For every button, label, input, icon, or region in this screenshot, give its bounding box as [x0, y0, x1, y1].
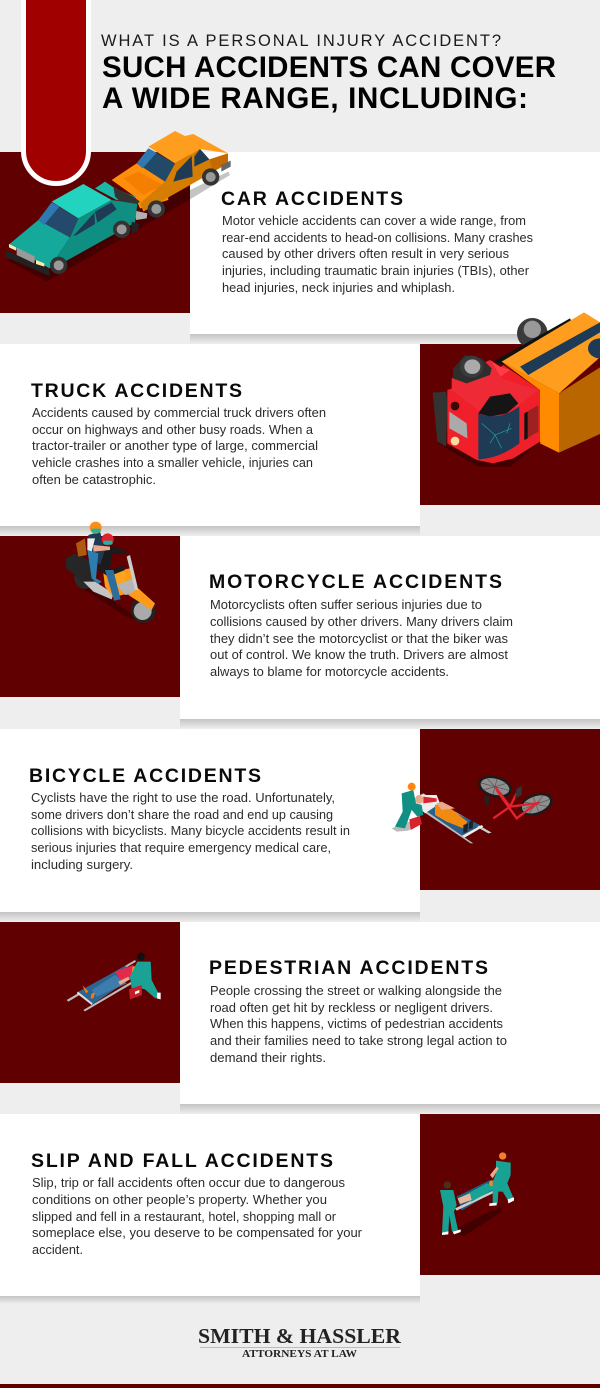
text block: bicycle accidents: Cyclists have the right to use the road. Unfortunately, [31, 791, 335, 805]
illustration: motorcycle riders [66, 522, 156, 625]
panel: bicycle accidents [0, 729, 600, 922]
footer bar [0, 1384, 600, 1388]
text block: slip and fall accidents: Slip, trip or fall accidents often occur due to dangerous [32, 1176, 345, 1190]
text block: truck accidents: vehicle crashes into a smaller vehicle, injuries can [32, 456, 313, 470]
text block: bicycle accidents: collisions with bicyclists. Many bicycle accidents result in [31, 824, 350, 838]
text block: car accidents: Motor vehicle accidents can cover a wide range, from [222, 214, 526, 228]
panel: pedestrian accidents [0, 922, 600, 1114]
logo: Smith & Hassler: ATTORNEYS AT LAW [242, 1349, 358, 1360]
text block: motorcycle accidents: always to blame for motorcycle accidents. [210, 665, 449, 679]
text block: slip and fall accidents: accident. [32, 1243, 83, 1257]
header tab [24, 0, 88, 183]
text block: car accidents: caused by other drivers often result in very serious [222, 247, 509, 261]
panel: truck accidents [0, 344, 600, 536]
text block: slip and fall accidents: conditions on other people’s property. Whether you [32, 1193, 327, 1207]
text block: pedestrian accidents: People crossing the street or walking alongside the [210, 984, 502, 998]
text block: motorcycle accidents: Motorcyclists often suffer serious injuries due to [210, 598, 482, 612]
text block: slip and fall accidents [32, 1176, 363, 1257]
text block: truck accidents: tractor-trailer or another type of large, commercial [32, 439, 318, 453]
text block: truck accidents: Accidents caused by commercial truck drivers often [32, 406, 326, 420]
text block: truck accidents: occur on highways and other busy roads. When a [32, 423, 314, 437]
text block: bicycle accidents: serious injuries that require emergency medical care, [31, 841, 331, 855]
text block: slip and fall accidents: slipped and fell in a restaurant, hotel, shopping mall or [32, 1210, 337, 1224]
text block: car accidents [222, 214, 533, 295]
text block: motorcycle accidents: they didn’t see the motorcyclist or that the biker was [210, 632, 508, 646]
title [101, 32, 556, 115]
text block: bicycle accidents [31, 791, 350, 872]
panel: motorcycle accidents [0, 536, 600, 729]
heading: car accidents: CAR ACCIDENTS [221, 188, 403, 210]
illustration: stretcher carriers [440, 1152, 514, 1237]
heading: bicycle accidents: BICYCLE ACCIDENTS [29, 765, 261, 787]
text block: bicycle accidents: including surgery. [31, 858, 133, 872]
heading: pedestrian accidents: PEDESTRIAN ACCIDENTS [209, 957, 488, 979]
heading: truck accidents: TRUCK ACCIDENTS [31, 380, 242, 402]
text block: car accidents: rear-end accidents to head-on collisions. Many crashes [222, 231, 533, 245]
logo: Smith & Hassler: SMITH & HASSLER [198, 1324, 401, 1348]
text block: car accidents: head injuries, neck injuries and whiplash. [222, 281, 455, 295]
text block: motorcycle accidents: collisions caused by other drivers. Many drivers claim [210, 615, 513, 629]
text block: motorcycle accidents: out of control. We know the truth. Drivers are almost [210, 648, 508, 662]
text block: bicycle accidents: some drivers don’t share the road and end up causing [31, 808, 333, 822]
text block: pedestrian accidents: road often get hit by reckless or negligent drivers. [210, 1001, 493, 1015]
text block: pedestrian accidents: demand their rights. [210, 1051, 326, 1065]
title: A WIDE RANGE, INCLUDING: [102, 82, 528, 115]
illustration: overturned truck [433, 312, 600, 467]
text block: pedestrian accidents: When this happens, victims of pedestrian accidents [210, 1017, 503, 1031]
illustration: car collision [5, 131, 231, 282]
illustration: injured cyclist and bicycle [392, 772, 556, 843]
text block: truck accidents [32, 406, 326, 487]
text block: truck accidents: often be catastrophic. [32, 473, 156, 487]
title: WHAT IS A PERSONAL INJURY ACCIDENT? [101, 32, 501, 50]
panel: slip and fall accidents [0, 1114, 600, 1304]
title: SUCH ACCIDENTS CAN COVER [102, 51, 556, 84]
text block: slip and fall accidents: someplace else, you deserve to be compensated for your [32, 1226, 363, 1240]
text block: car accidents: injuries, including traumatic brain injuries (TBIs), other [222, 264, 530, 278]
text block: pedestrian accidents [210, 984, 507, 1065]
text block: motorcycle accidents [210, 598, 513, 679]
panel: car accidents [0, 152, 600, 344]
text block: pedestrian accidents: and their families need to take strong legal action to [210, 1034, 507, 1048]
heading: slip and fall accidents: SLIP AND FALL ACCIDENTS [31, 1150, 333, 1172]
logo: Smith & Hassler [198, 1324, 401, 1360]
heading: motorcycle accidents: MOTORCYCLE ACCIDENTS [209, 571, 502, 593]
illustration: injured pedestrian [67, 953, 161, 1011]
